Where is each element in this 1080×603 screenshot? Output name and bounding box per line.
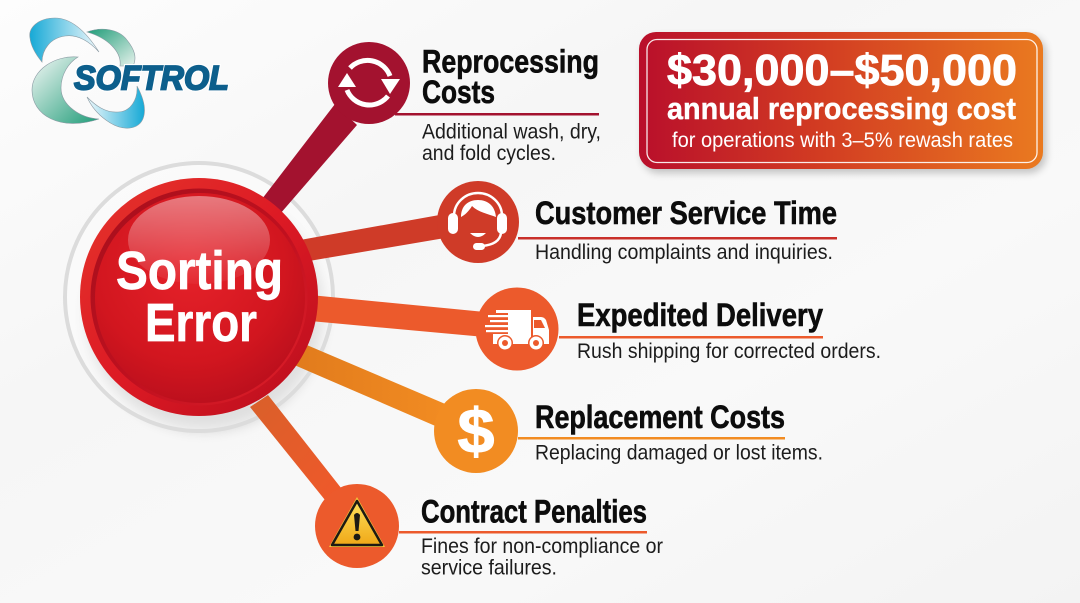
icon: warning triangle bbox=[315, 484, 399, 568]
item: customer service time bbox=[437, 181, 837, 264]
heading: Customer Service Time bbox=[535, 195, 837, 231]
description: Additional wash, dry, bbox=[422, 120, 601, 144]
connector: reprocessing costs bbox=[262, 104, 357, 214]
description: Rush shipping for corrected orders. bbox=[577, 340, 881, 363]
heading: Replacement Costs bbox=[535, 399, 785, 435]
item: reprocessing costs: Costs bbox=[422, 74, 495, 110]
item: reprocessing costs: and fold cycles. bbox=[422, 142, 556, 165]
item: reprocessing costs bbox=[328, 42, 601, 165]
connector: customer service time bbox=[300, 214, 445, 262]
callout: annual reprocessing cost: annual reprocessing cost bbox=[667, 91, 1016, 126]
connector: contract penalties bbox=[250, 395, 345, 500]
heading: Contract Penalties bbox=[421, 494, 647, 530]
heading: Expedited Delivery bbox=[577, 297, 823, 333]
description: Handling complaints and inquiries. bbox=[535, 241, 833, 264]
callout: annual reprocessing cost: for operations with 3–5% rewash rates bbox=[672, 129, 1013, 152]
central button: sorting error bbox=[80, 178, 318, 416]
callout: annual reprocessing cost bbox=[639, 32, 1046, 173]
icon: delivery truck bbox=[476, 288, 558, 370]
icon: headset agent bbox=[437, 181, 519, 263]
logo: Softrol: SOFTROL bbox=[74, 60, 229, 98]
callout: annual reprocessing cost: $30,000–$50,000 bbox=[667, 46, 1017, 95]
button halo ring and shadow bbox=[65, 163, 333, 431]
icon: refresh arrows bbox=[328, 42, 410, 124]
heading: Reprocessing bbox=[422, 44, 599, 80]
connector: replacement costs bbox=[285, 340, 450, 428]
item: replacement costs bbox=[434, 389, 823, 473]
item: expedited delivery bbox=[476, 288, 881, 370]
item: contract penalties: service failures. bbox=[421, 556, 557, 580]
icon: dollar sign bbox=[434, 389, 518, 473]
logo: Softrol bbox=[30, 18, 229, 128]
logo: Softrol: SOFTROL bbox=[74, 60, 229, 98]
item: contract penalties bbox=[315, 484, 663, 580]
central button: sorting error: Error bbox=[145, 293, 257, 353]
central button: sorting error: Sorting bbox=[116, 241, 283, 301]
description: Fines for non-compliance or bbox=[421, 535, 663, 558]
description: Replacing damaged or lost items. bbox=[535, 442, 823, 464]
connector: expedited delivery bbox=[310, 295, 485, 337]
icon: dollar sign: $ bbox=[458, 397, 494, 467]
